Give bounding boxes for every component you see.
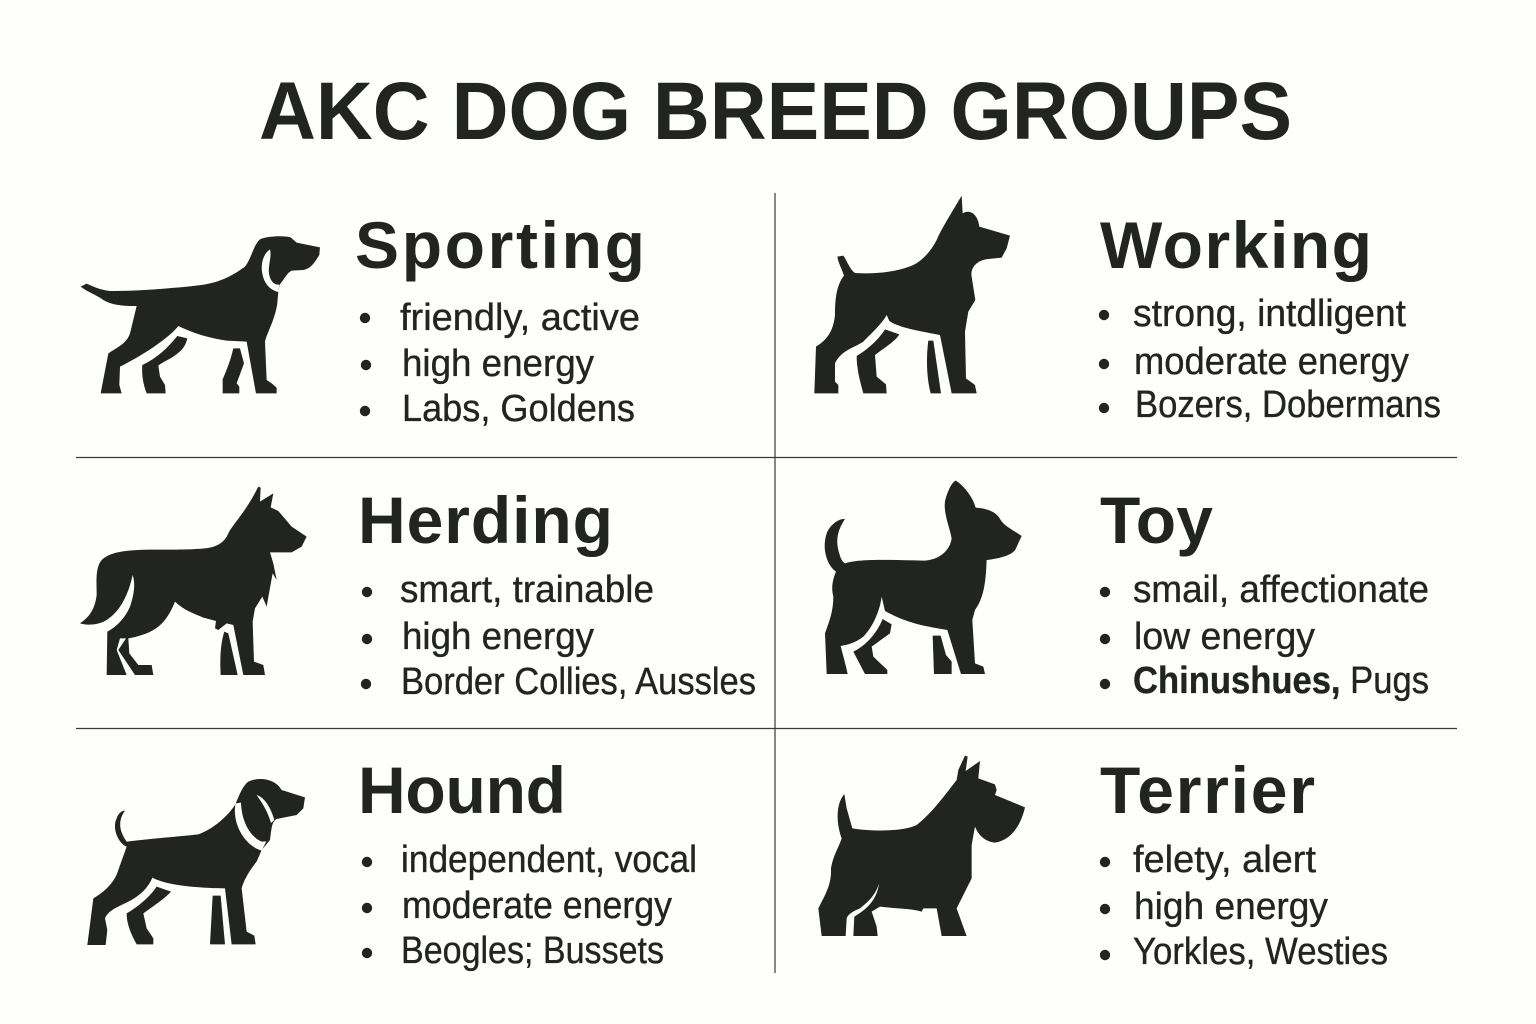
list: Hound traits: moderate energy (402, 885, 672, 927)
icon: working dog silhouette (814, 196, 1010, 393)
heading: Toy: Toy (1100, 483, 1213, 557)
panel: Hound (87, 753, 697, 972)
panel: Sporting (81, 208, 645, 430)
heading: Working: Working (1100, 208, 1372, 282)
panel: Toy (825, 481, 1429, 702)
list: Toy traits: smail, affectionate (1133, 569, 1429, 611)
list: Terrier traits (1100, 839, 1388, 973)
panel: Working (814, 196, 1441, 426)
list: Sporting traits (360, 297, 640, 430)
list: Hound traits: independent, vocal (401, 839, 697, 881)
list: Sporting traits: friendly, active (400, 297, 640, 339)
icon: toy dog silhouette (825, 481, 1022, 674)
list: Herding traits: smart, trainable (400, 569, 654, 611)
list: Toy traits: Chinushues, Pugs (1133, 660, 1429, 702)
list: Herding traits: Border Collies, Aussles (401, 661, 756, 703)
list: Terrier traits: high energy (1134, 886, 1328, 928)
heading: Terrier: Terrier (1100, 753, 1315, 827)
title: AKC DOG BREED GROUPS (259, 66, 1292, 157)
list: Sporting traits: high energy (402, 343, 594, 385)
panel: Herding (80, 483, 756, 703)
list: Herding traits: high energy (402, 616, 594, 658)
list: Terrier traits: Yorkles, Westies (1133, 931, 1388, 973)
icon: hound dog silhouette (87, 779, 305, 945)
list: Hound traits (362, 839, 697, 972)
list: Toy traits (1100, 569, 1429, 702)
list: Working traits (1099, 293, 1441, 426)
heading: Hound: Hound (358, 753, 566, 827)
panel: Terrier (818, 753, 1388, 973)
list: Working traits: moderate energy (1134, 341, 1409, 383)
list: Sporting traits: Labs, Goldens (402, 388, 635, 430)
heading: Herding: Herding (358, 483, 613, 557)
list: Working traits: Bozers, Dobermans (1135, 384, 1441, 426)
list: Hound traits: Beogles; Bussets (401, 930, 664, 972)
icon: terrier dog silhouette (818, 756, 1025, 936)
icon: herding dog silhouette (80, 487, 307, 675)
list: Toy traits: low energy (1134, 616, 1315, 658)
list: Terrier traits: felety, alert (1133, 839, 1316, 881)
icon: sporting dog silhouette (81, 236, 320, 393)
list: Herding traits (361, 569, 756, 703)
list: Working traits: strong, intdligent (1133, 293, 1406, 335)
heading: Sporting: Sporting (355, 208, 645, 282)
